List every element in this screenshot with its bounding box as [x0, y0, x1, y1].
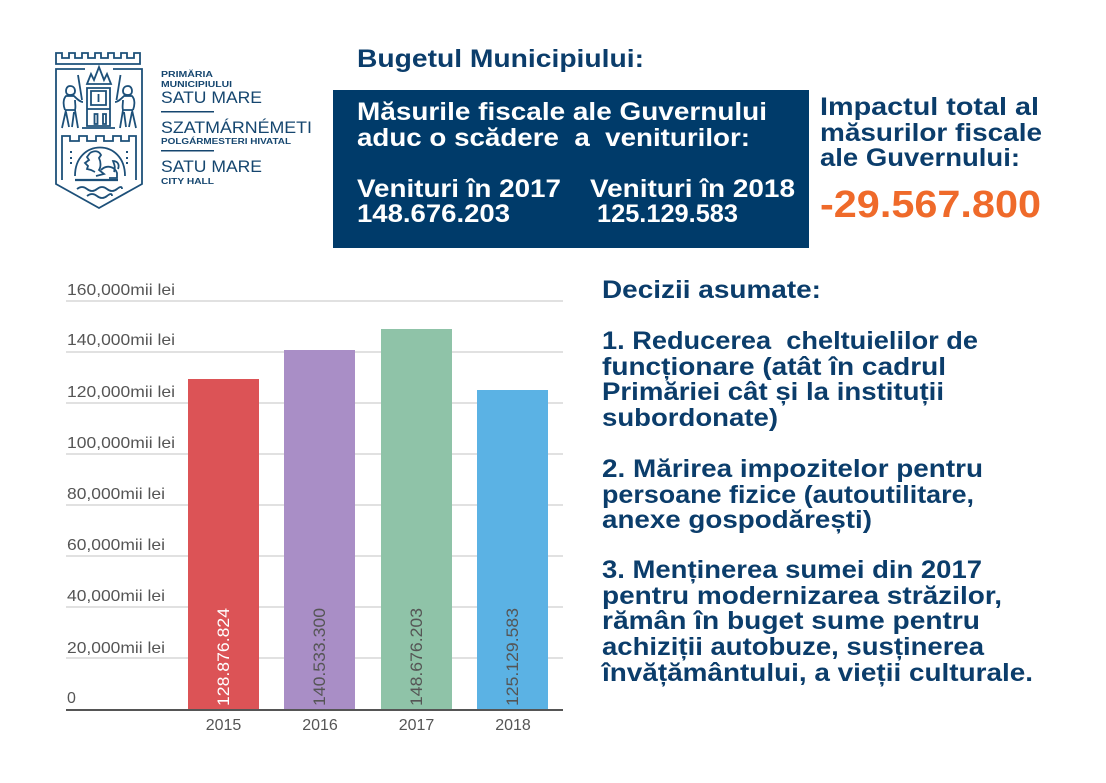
lower wall	[62, 136, 136, 180]
bar chart: 2015	[206, 717, 241, 734]
bar chart: 20,000mii lei	[67, 640, 165, 657]
decision 1	[602, 327, 978, 432]
panel: fiscal measures	[333, 90, 809, 248]
waves	[77, 187, 122, 198]
bar chart: 0	[67, 690, 76, 707]
bar chart: 148.676.203	[408, 608, 426, 706]
bar chart: 128.876.824	[215, 608, 233, 706]
bar chart: 125.129.583	[504, 608, 522, 706]
decision 1: subordonate)	[602, 404, 778, 432]
logo text: POLGÁRMESTERI HIVATAL	[161, 137, 291, 146]
panel: fiscal measures: aduc o scădere a veniturilor:	[357, 124, 750, 152]
bar chart: 60,000mii lei	[67, 537, 165, 554]
decision 1: Primăriei cât și la instituții	[602, 378, 944, 406]
panel: fiscal measures: 125.129.583	[597, 200, 738, 228]
decision 2: anexe gospodărești)	[602, 506, 872, 534]
bar chart: 100,000mii lei	[67, 435, 175, 452]
bar chart: 120,000mii lei	[67, 384, 175, 401]
decision 2: 2. Mărirea impozitelor pentru	[602, 455, 983, 483]
logo text: CITY HALL	[161, 177, 214, 186]
decision 3: achiziții autobuze, susținerea	[602, 633, 985, 661]
logo text: PRIMĂRIA	[161, 70, 213, 79]
decision 3: învățământului, a vieții culturale.	[600, 659, 1033, 687]
decision 3: 3. Menținerea sumei din 2017	[602, 556, 982, 584]
decision 2: persoane fizice (autoutilitare,	[602, 481, 974, 509]
tower	[87, 67, 111, 126]
bar chart: 140,000mii lei	[67, 332, 175, 349]
total impact heading: ale Guvernului:	[820, 144, 1020, 172]
logo text: MUNICIPIULUI	[161, 80, 232, 89]
logo text: SATU MARE	[161, 157, 262, 176]
bar chart: 2016	[302, 717, 338, 734]
logo text: SZATMÁRNÉMETI	[161, 118, 312, 137]
total impact heading	[820, 93, 1042, 172]
decision 3: pentru modernizarea străzilor,	[602, 582, 1002, 610]
lion	[85, 151, 119, 178]
title: Bugetul Municipiului:	[357, 45, 644, 73]
panel: fiscal measures: Venituri în 2017	[357, 175, 561, 203]
bar chart: 2017	[399, 717, 434, 734]
bar chart: 40,000mii lei	[67, 588, 165, 605]
decision 2	[602, 455, 983, 534]
decision 3: rămân în buget sume pentru	[602, 607, 980, 635]
panel: fiscal measures: Venituri în 2018	[590, 175, 795, 203]
logo crest	[56, 53, 142, 208]
decision 1: funcționare (atât în cadrul	[602, 353, 946, 381]
decision 1: 1. Reducerea cheltuielilor de	[602, 327, 978, 355]
logo text: SATU MARE	[161, 88, 262, 107]
total impact number: -29.567.800	[820, 184, 1041, 226]
panel: fiscal measures: Măsurile fiscale ale Guvernului	[357, 98, 767, 126]
knights	[78, 75, 120, 100]
decision 3	[600, 556, 1033, 687]
total impact heading: Impactul total al	[820, 93, 1039, 121]
bar chart: 160,000mii lei	[67, 282, 175, 299]
bar chart	[66, 282, 563, 734]
bar chart: 2018	[495, 717, 531, 734]
panel: fiscal measures: 148.676.203	[357, 200, 510, 228]
decisions heading: Decizii asumate:	[602, 276, 821, 304]
bar chart: 80,000mii lei	[67, 486, 165, 503]
total impact heading: măsurilor fiscale	[820, 119, 1042, 147]
bar chart: 140.533.300	[311, 608, 329, 706]
logo text	[161, 70, 312, 186]
